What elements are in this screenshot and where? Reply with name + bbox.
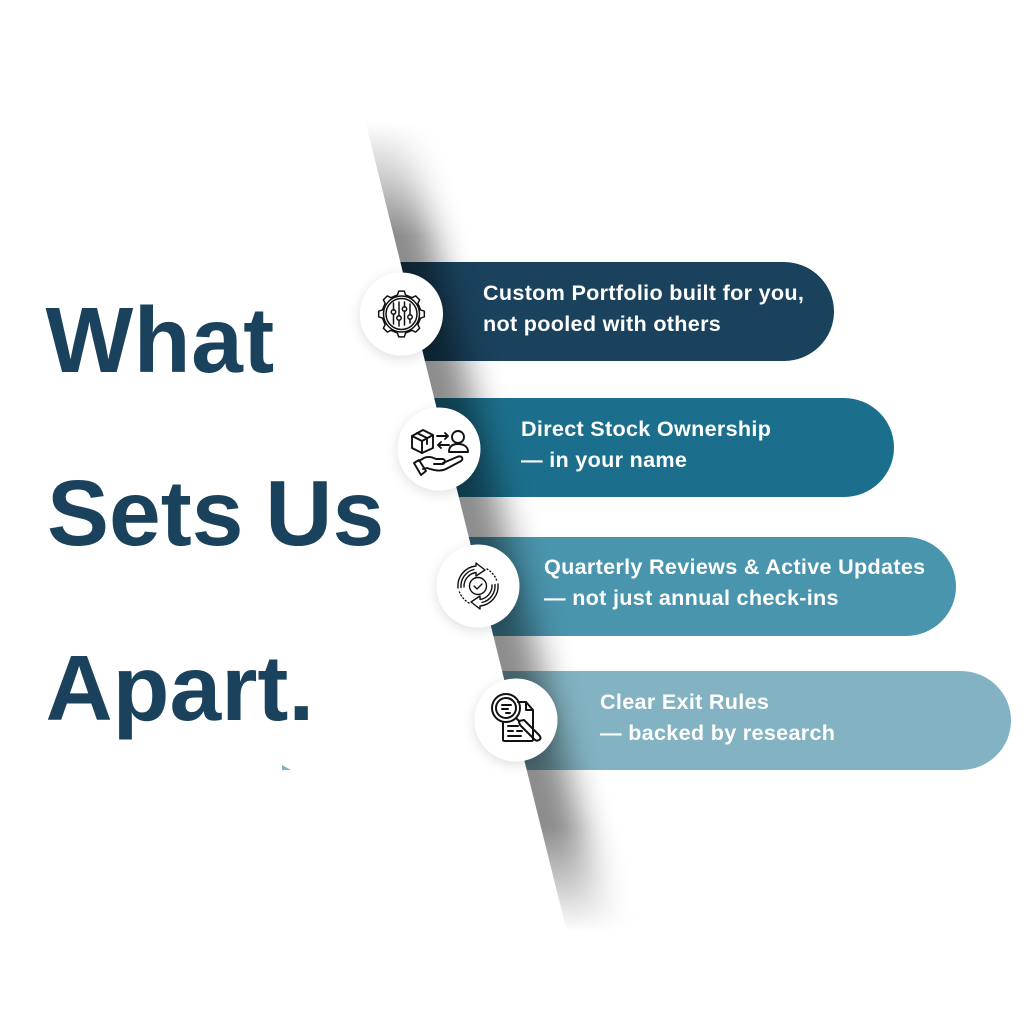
bar text: quarterly reviews: Quarterly Reviews & Active Updates <box>544 554 925 579</box>
bar text: clear exit rules: — backed by research <box>600 720 835 745</box>
bar text: clear exit rules: Clear Exit Rules <box>600 689 769 714</box>
bar text: clear exit rules <box>600 689 835 745</box>
title: Apart. <box>46 636 314 740</box>
bar text: custom portfolio: Custom Portfolio built for you, <box>483 280 804 305</box>
bar text: direct stock ownership <box>521 416 771 472</box>
small triangle fragment <box>282 765 291 770</box>
icon circle: refresh with check <box>436 544 520 628</box>
bar: direct stock ownership <box>433 398 894 497</box>
bar text: quarterly reviews <box>544 554 925 610</box>
bar text: quarterly reviews: — not just annual check-ins <box>544 585 839 610</box>
icon circle: gear with sliders <box>360 272 443 356</box>
bar: clear exit rules <box>500 671 1011 770</box>
bar: custom portfolio <box>399 262 834 361</box>
title: Sets Us <box>47 461 384 565</box>
bar text: custom portfolio <box>483 280 804 336</box>
bar text: direct stock ownership: — in your name <box>521 447 687 472</box>
icon circle: magnifier over document <box>474 678 558 762</box>
title: What <box>46 288 275 392</box>
icon circle: box, person and hand <box>398 408 480 490</box>
white panel left of the fold <box>0 0 572 1024</box>
bar: quarterly reviews <box>468 537 956 636</box>
diagonal fold shadow <box>368 132 613 924</box>
bar text: direct stock ownership: Direct Stock Ownership <box>521 416 771 441</box>
bar text: custom portfolio: not pooled with others <box>483 311 721 336</box>
title <box>46 288 384 740</box>
